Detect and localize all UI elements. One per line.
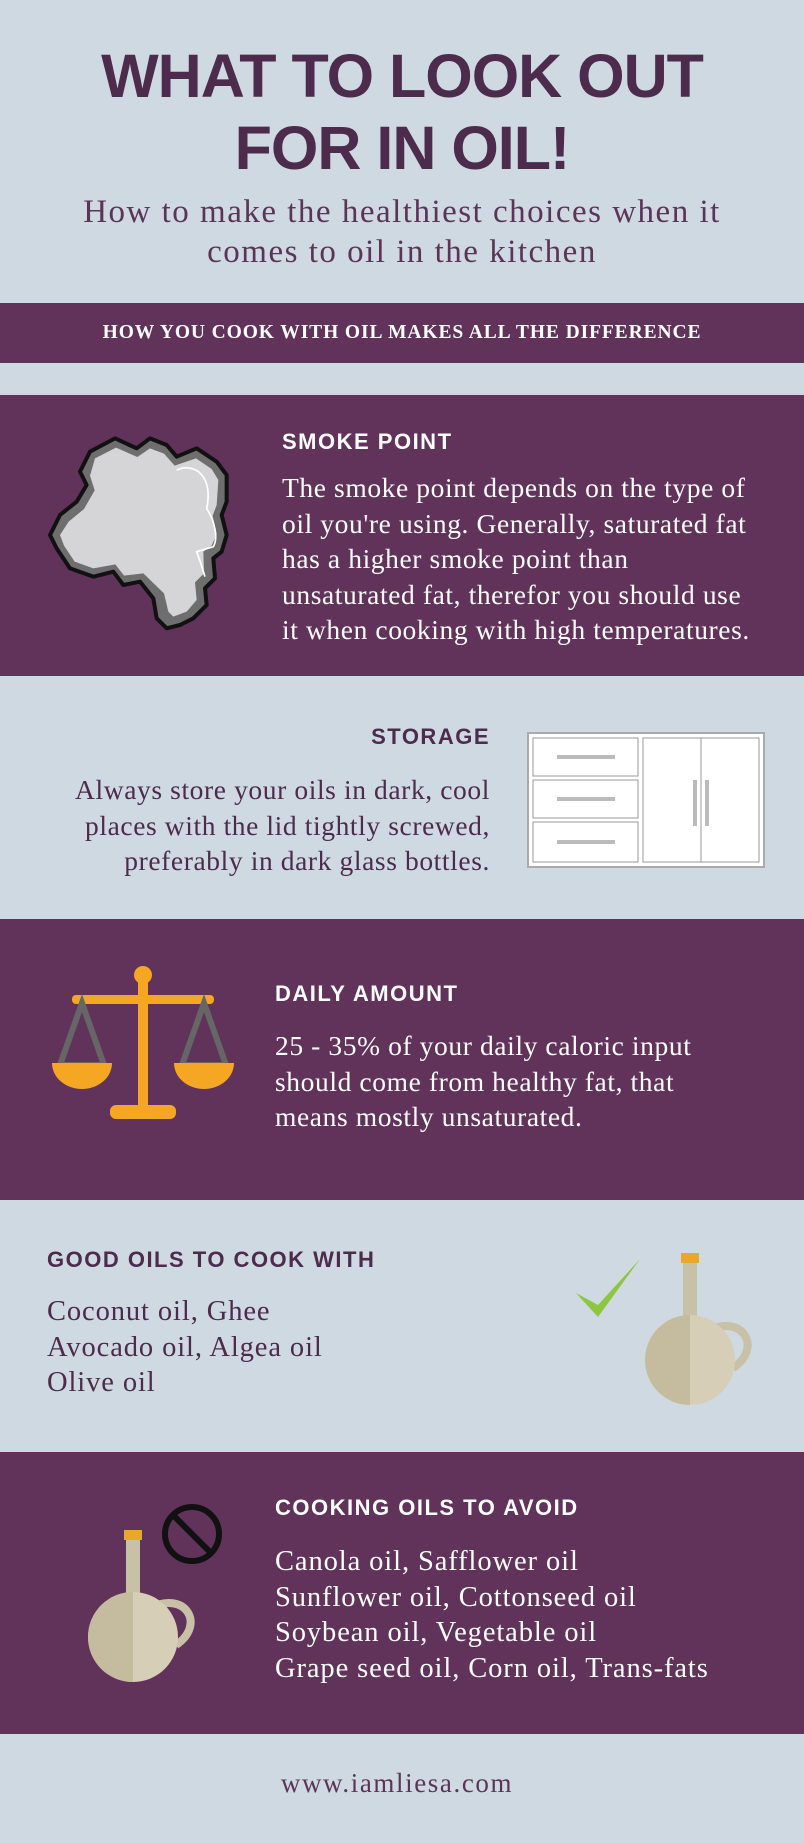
daily body: should come from healthy fat, that [275, 1066, 674, 1096]
icon: smoke cloud [48, 436, 229, 630]
avoid list: Grape seed oil, Corn oil, Trans-fats [275, 1652, 709, 1684]
subtitle: How to make the healthiest choices when it [83, 194, 721, 230]
banner [0, 303, 804, 363]
smoke body: unsaturated fat, therefor you should use [282, 578, 741, 610]
storage body: Always store your oils in dark, cool [75, 774, 490, 805]
daily body: 25 - 35% of your daily caloric input [275, 1030, 691, 1061]
panel: storage [75, 724, 765, 876]
smoke body [282, 472, 750, 645]
good oils list: Olive oil [47, 1367, 156, 1398]
avoid list: Canola oil, Safflower oil [275, 1546, 579, 1577]
banner: HOW YOU COOK WITH OIL MAKES ALL THE DIFFERENCE [103, 322, 701, 343]
title [101, 42, 704, 182]
avoid heading: COOKING OILS TO AVOID [275, 1495, 579, 1520]
storage body: preferably in dark glass bottles. [124, 845, 490, 876]
footer url: www.iamliesa.com [281, 1768, 513, 1798]
smoke body: The smoke point depends on the type of [282, 472, 745, 503]
daily heading: DAILY AMOUNT [275, 981, 458, 1006]
subtitle: comes to oil in the kitchen [207, 234, 597, 270]
icon: avoid oil bottle [88, 1530, 195, 1682]
panel: oils to avoid [0, 1452, 804, 1734]
subtitle [83, 194, 721, 270]
daily body [275, 1030, 691, 1132]
smoke heading: SMOKE POINT [282, 429, 453, 454]
title: WHAT TO LOOK OUT [101, 42, 703, 110]
icon: scale [52, 966, 234, 1119]
smoke body: has a higher smoke point than [282, 543, 629, 574]
storage body: places with the lid tightly screwed, [85, 810, 490, 840]
smoke body: oil you're using. Generally, saturated fat [282, 508, 746, 538]
avoid list: Soybean oil, Vegetable oil [275, 1617, 597, 1648]
icon: good oil bottle [645, 1253, 752, 1405]
title: FOR IN OIL! [235, 114, 569, 182]
good oils list: Avocado oil, Algea oil [47, 1332, 323, 1362]
panel: smoke point [0, 395, 804, 676]
avoid list: Sunflower oil, Cottonseed oil [275, 1582, 637, 1612]
icon: checkmark [576, 1259, 640, 1317]
icon: no sign [162, 1504, 222, 1564]
storage body [75, 774, 490, 876]
smoke body: it when cooking with high temperatures. [282, 614, 750, 645]
daily body: means mostly unsaturated. [275, 1101, 583, 1132]
icon: cabinet [527, 732, 765, 868]
storage heading: STORAGE [371, 724, 490, 749]
good oils heading: GOOD OILS TO COOK WITH [47, 1247, 375, 1272]
panel: daily amount [0, 919, 804, 1200]
good oils list: Coconut oil, Ghee [47, 1296, 270, 1327]
good oils list [47, 1296, 323, 1398]
panel: good oils [47, 1247, 752, 1405]
avoid list [275, 1546, 709, 1684]
